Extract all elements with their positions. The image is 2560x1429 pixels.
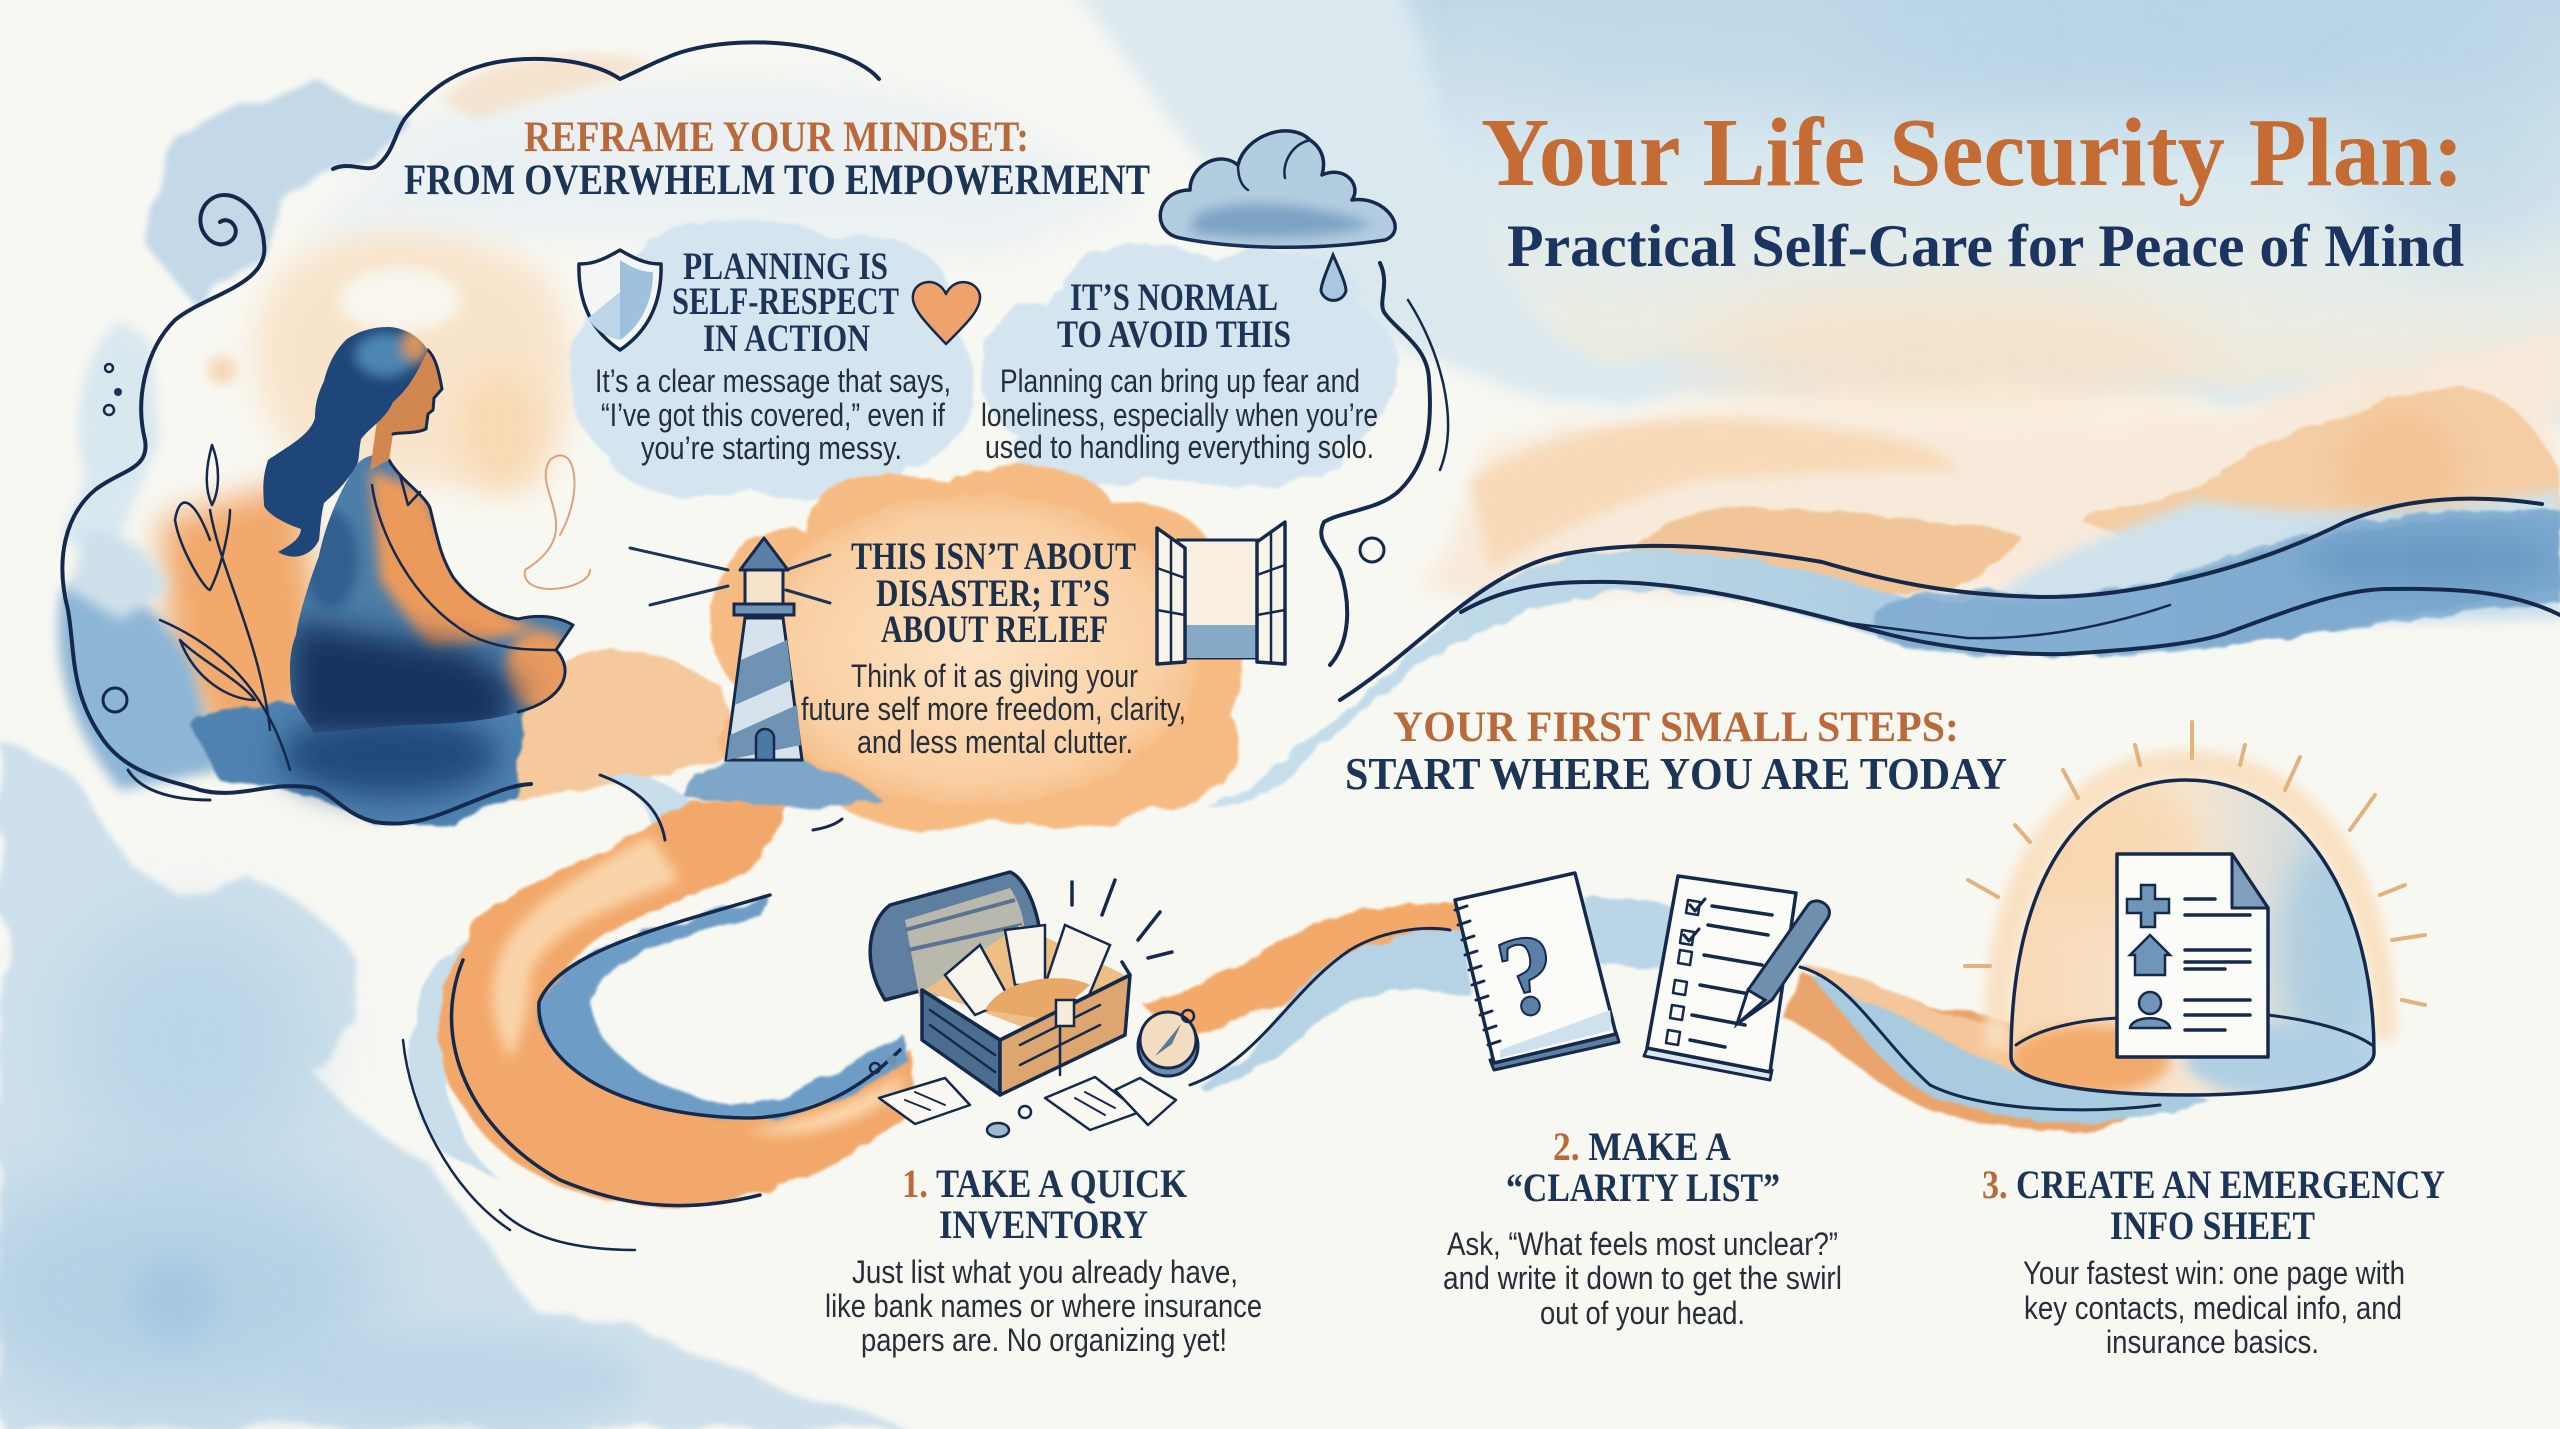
text: planning is self-respect: IN ACTION [703,317,870,360]
text: step 2: “CLARITY LIST” [1506,1165,1780,1210]
text: step 1: papers are. No organizing yet! [861,1322,1227,1358]
icon: pen [1737,901,1829,1024]
icon: rain cloud [1160,131,1395,247]
heading: reframe your mindset: FROM OVERWHELM TO EMPOWERMENT [404,157,1150,204]
text: step 1: 1. TAKE A QUICK [902,1161,1187,1206]
panel: reframe your mindset thought bubble [59,42,1448,830]
text: normal to avoid [981,276,1378,465]
icon: heart [913,282,980,344]
ribbon: path from bubble to first step [403,775,912,1250]
speech cloud: normal to avoid [982,244,1398,486]
text: step 2: 2. MAKE A [1553,1124,1731,1169]
text: this isn't about disaster: and less mental clutter. [857,724,1133,760]
outline of thought bubble [62,42,1448,830]
watercolor wash inside bubble [59,54,1150,825]
text: step 2: out of your head. [1540,1295,1745,1331]
title [1481,99,2464,279]
text: normal to avoid: used to handling everything solo. [985,429,1374,465]
speech cloud: relief [710,465,1245,830]
text: step 1 [825,1161,1262,1358]
text: this isn't about disaster: future self more freedom, clarity, [801,691,1186,727]
text: this isn't about disaster [801,535,1186,760]
text: step 2: Ask, “What feels most unclear?” [1447,1226,1838,1262]
icon: glass dome with info sheet [1965,722,2425,1095]
title: Practical Self-Care for Peace of Mind [1507,213,2464,279]
text: planning is self-respect: SELF-RESPECT [672,280,899,323]
icon: notebook with question mark: ? [1486,907,1569,1043]
ribbon: step connector [1140,897,2210,1132]
text: step 3: INFO SHEET [2110,1203,2315,1248]
text: step 1: Just list what you already have, [852,1254,1238,1290]
text: normal to avoid: loneliness, especially when you’re [981,397,1378,433]
text: planning is self-respect: “I’ve got this covered,” even if [601,397,945,433]
heading: first small steps: YOUR FIRST SMALL STEPS: [1393,704,1959,751]
text: step 3: 3. CREATE AN EMERGENCY [1982,1162,2445,1207]
text: step 1: INVENTORY [939,1202,1148,1247]
text: normal to avoid: TO AVOID THIS [1057,313,1291,356]
text: step 3: Your fastest win: one page with [2023,1255,2405,1291]
text: planning is self-respect [595,245,951,466]
icon: scattered papers and coins [870,1055,1176,1137]
woman hair and face [263,327,442,557]
heading: reframe your mindset [404,114,1150,204]
icon: treasure chest [870,872,1172,1095]
icon: lighthouse [630,538,880,807]
text: step 3: key contacts, medical info, and [2024,1290,2402,1326]
text: normal to avoid: IT’S NORMAL [1070,276,1278,319]
text: this isn't about disaster: Think of it as giving your [851,658,1138,694]
illustration: plant [160,445,290,770]
text: step 2 [1443,1124,1842,1331]
title: Your Life Security Plan: [1481,99,2464,206]
icon: water drop [1321,255,1346,300]
icon: open window [1157,522,1285,664]
text: step 2: and write it down to get the swirl [1443,1260,1842,1296]
text: this isn't about disaster: DISASTER; IT’S [876,572,1110,615]
illustration: meditating woman [263,327,575,740]
text: planning is self-respect: It’s a clear message that says, [595,363,951,399]
watercolor waves [1210,499,2560,810]
icon: shield [579,250,661,350]
text: planning is self-respect: PLANNING IS [683,245,888,288]
watercolor sky [1050,0,2560,440]
text: this isn't about disaster: ABOUT RELIEF [881,608,1108,651]
heading: first small steps: START WHERE YOU ARE TODAY [1345,749,2007,799]
text: normal to avoid: Planning can bring up fear and [1000,363,1360,399]
heading: first small steps [1345,704,2007,799]
icon: notebook with question mark [1455,873,1619,1070]
icon: checklist [1644,876,1796,1080]
woman body [290,455,575,740]
text: planning is self-respect: you’re starting messy. [641,430,902,466]
text: step 3 [1982,1162,2445,1360]
text: this isn't about disaster: THIS ISN’T ABOUT [851,535,1136,578]
watercolor cloud bottom left [0,742,912,1429]
text: step 3: insurance basics. [2106,1324,2319,1360]
text: step 1: like bank names or where insurance [825,1288,1262,1324]
watercolor hills [1420,330,2560,630]
speech cloud: planning is self-respect [570,218,975,500]
icon: compass [1138,1010,1198,1076]
heading: reframe your mindset: REFRAME YOUR MINDSET: [524,114,1029,161]
